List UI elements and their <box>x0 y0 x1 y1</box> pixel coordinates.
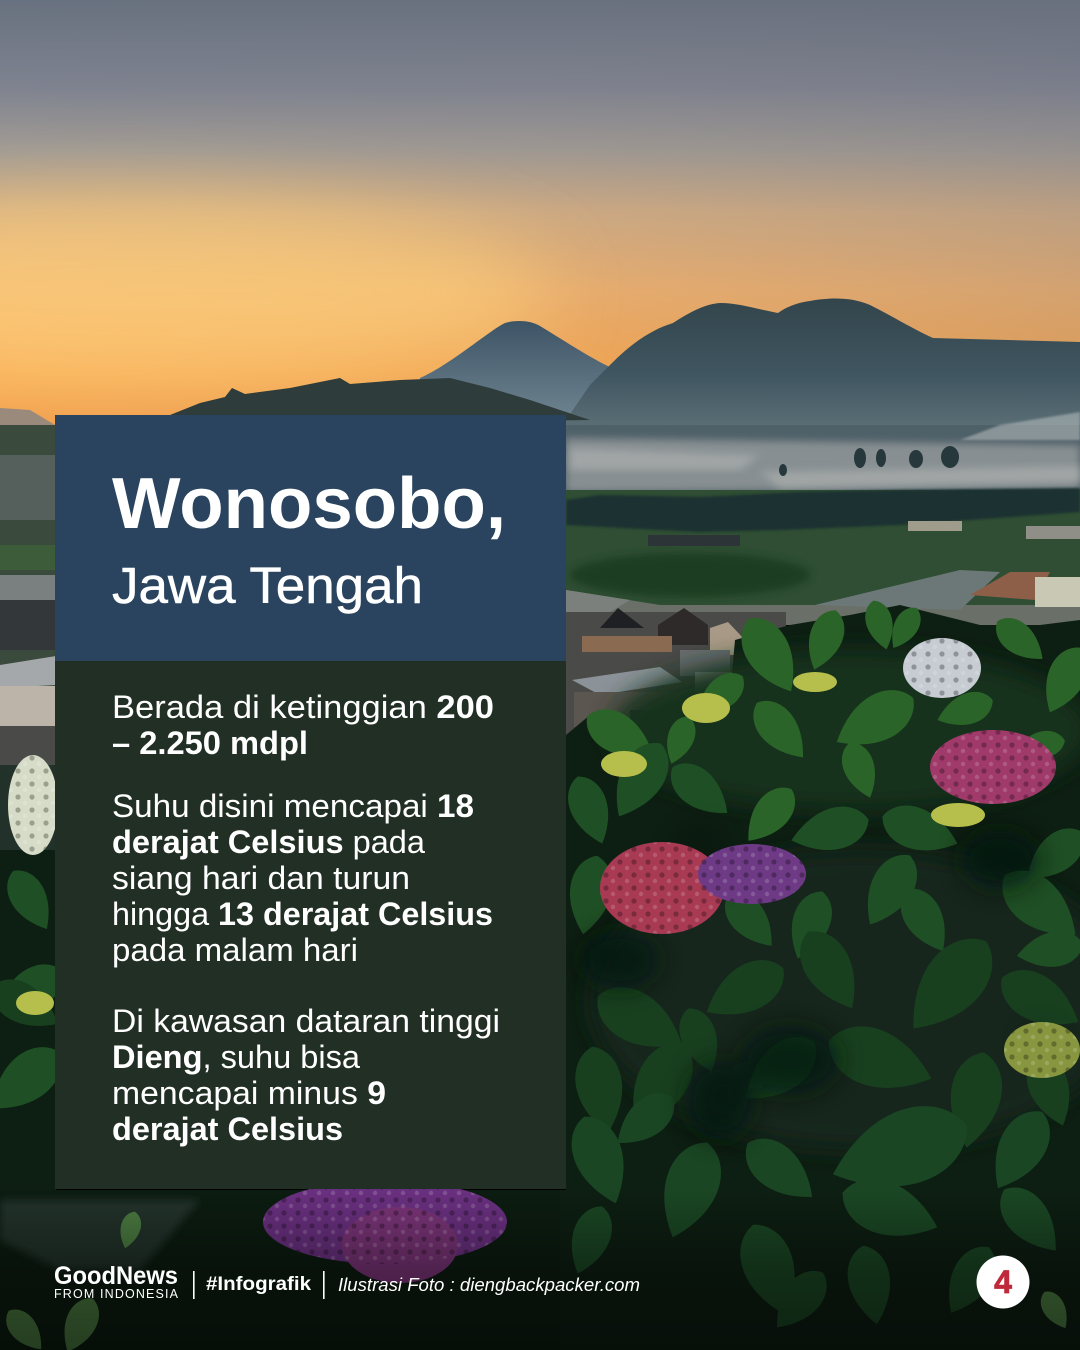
leaves <box>0 597 1080 1350</box>
subheading: Jawa Tengah: Jawa Tengah <box>112 557 423 614</box>
text: altitude: – 2.250 mdpl <box>112 725 308 761</box>
text: Dieng: Dieng, suhu bisa <box>112 1039 360 1075</box>
page number badge: 4 <box>994 1264 1012 1300</box>
text: altitude <box>112 689 494 761</box>
text: Dieng: Di kawasan dataran tinggi <box>112 1003 500 1039</box>
hashtag: #Infografik <box>206 1274 311 1295</box>
flower: yellow small <box>16 672 985 1015</box>
sky <box>0 0 1080 440</box>
left strip: town and fields <box>0 425 56 865</box>
flower: purple bottom <box>263 1180 507 1283</box>
village rooftops <box>566 608 786 737</box>
text: temperature: hingga 13 derajat Celsius <box>112 896 493 932</box>
text: altitude: Berada di ketinggian 200 <box>112 689 494 725</box>
flower: white left <box>8 755 58 855</box>
logo: GoodNews from Indonesia: FROM INDONESIA <box>54 1287 179 1301</box>
text: temperature: derajat Celsius pada <box>112 824 425 860</box>
text: Dieng: mencapai minus 9 <box>112 1075 386 1111</box>
footer <box>54 1262 640 1301</box>
heading: Wonosobo: Wonosobo, <box>112 464 506 544</box>
flower: pink right <box>930 730 1056 804</box>
text: Dieng <box>112 1003 500 1147</box>
flower: white <box>903 638 981 698</box>
text: temperature <box>112 788 493 968</box>
flower: green right <box>1004 1022 1080 1078</box>
dark gaps between leaves <box>580 820 1060 1140</box>
text: Dieng: derajat Celsius <box>112 1111 343 1147</box>
text: temperature: Suhu disini mencapai 18 <box>112 788 474 824</box>
text: temperature: siang hari dan turun <box>112 860 410 896</box>
panel: title <box>55 415 566 661</box>
bottom shade <box>0 1190 1080 1350</box>
text: temperature: pada malam hari <box>112 932 358 968</box>
foliage base <box>0 605 1080 1350</box>
hydrangea flowers <box>8 638 1080 1283</box>
flower: purple centre <box>698 844 806 904</box>
logo: GoodNews from Indonesia: GoodNews <box>54 1262 178 1290</box>
flower: magenta centre <box>600 842 724 934</box>
mountains <box>0 298 1080 435</box>
photo credit: Ilustrasi Foto : diengbackpacker.com <box>338 1275 640 1295</box>
page number badge <box>976 1256 1030 1308</box>
valley with fog, tree line and fields <box>0 412 1080 625</box>
logo: GoodNews from Indonesia <box>54 1262 179 1301</box>
panel: facts <box>55 661 566 1189</box>
